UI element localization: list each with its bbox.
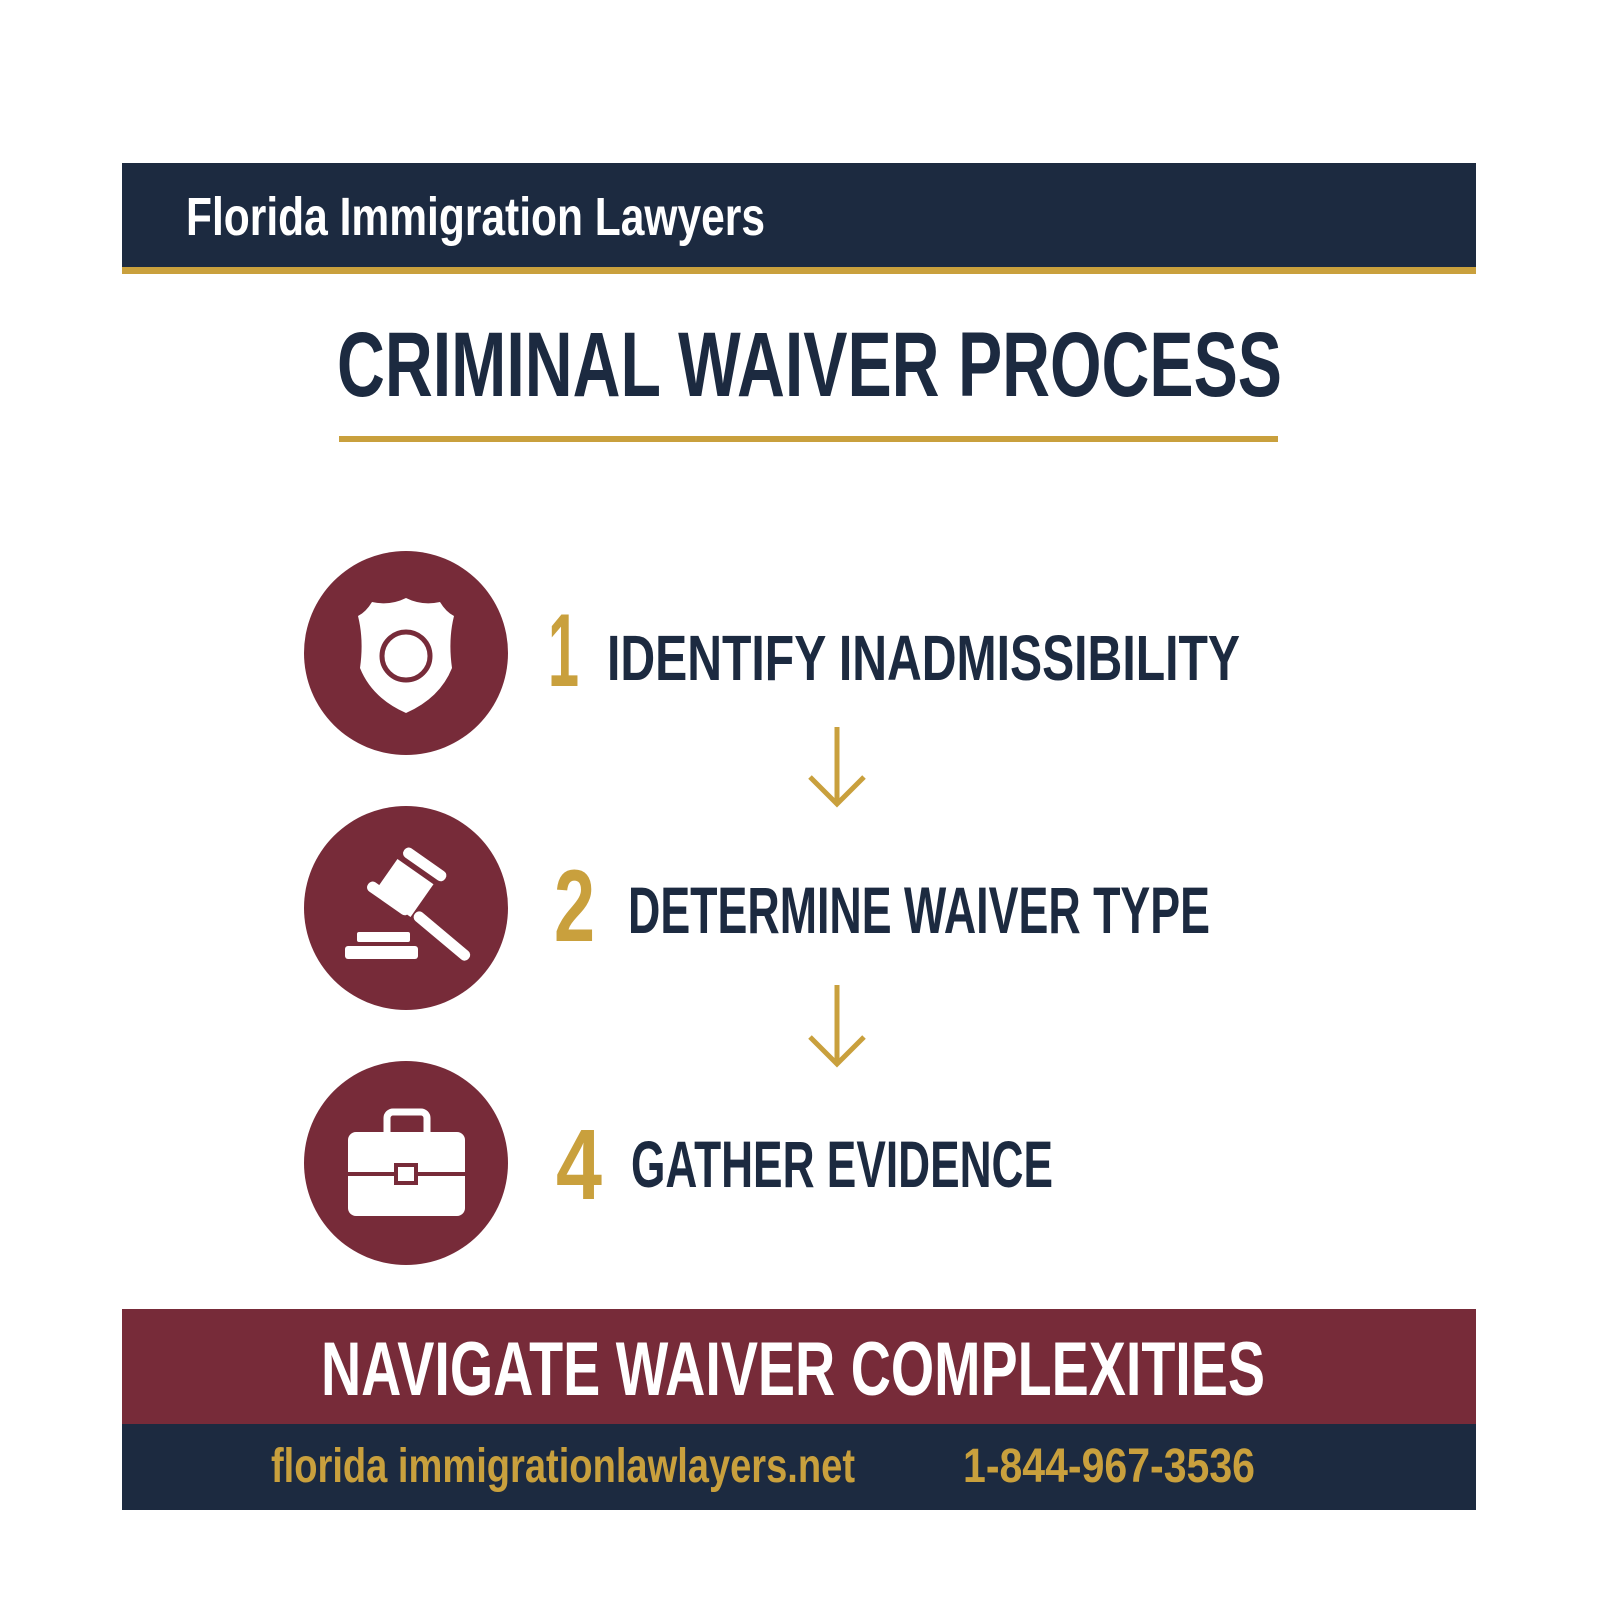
icon: gavel bbox=[304, 806, 508, 1010]
icon: badge bbox=[304, 551, 508, 755]
label 1: IDENTIFY INADMISSIBILITY bbox=[607, 622, 1240, 694]
header text: Florida Immigration Lawyers bbox=[186, 187, 765, 247]
title underline bbox=[339, 436, 1278, 442]
arrow 1 bbox=[810, 727, 864, 804]
banner text: NAVIGATE WAIVER COMPLEXITIES bbox=[321, 1327, 1265, 1412]
website: florida immigrationlawlayers.net bbox=[271, 1440, 855, 1493]
number 2: 2 bbox=[554, 849, 595, 963]
arrow 2 bbox=[810, 985, 864, 1064]
footer banner bbox=[122, 1309, 1476, 1424]
step 2 bbox=[304, 806, 1210, 1010]
step 1 bbox=[304, 551, 1240, 755]
contact bar bbox=[122, 1424, 1476, 1510]
icon: briefcase bbox=[304, 1061, 508, 1265]
number 4: 4 bbox=[556, 1109, 602, 1221]
step 3 bbox=[304, 1061, 1053, 1265]
phone: 1-844-967-3536 bbox=[963, 1440, 1255, 1493]
number 1: 1 bbox=[548, 593, 579, 709]
label 3: GATHER EVIDENCE bbox=[631, 1127, 1053, 1201]
header bar bbox=[122, 163, 1476, 274]
label 2: DETERMINE WAIVER TYPE bbox=[628, 873, 1210, 947]
